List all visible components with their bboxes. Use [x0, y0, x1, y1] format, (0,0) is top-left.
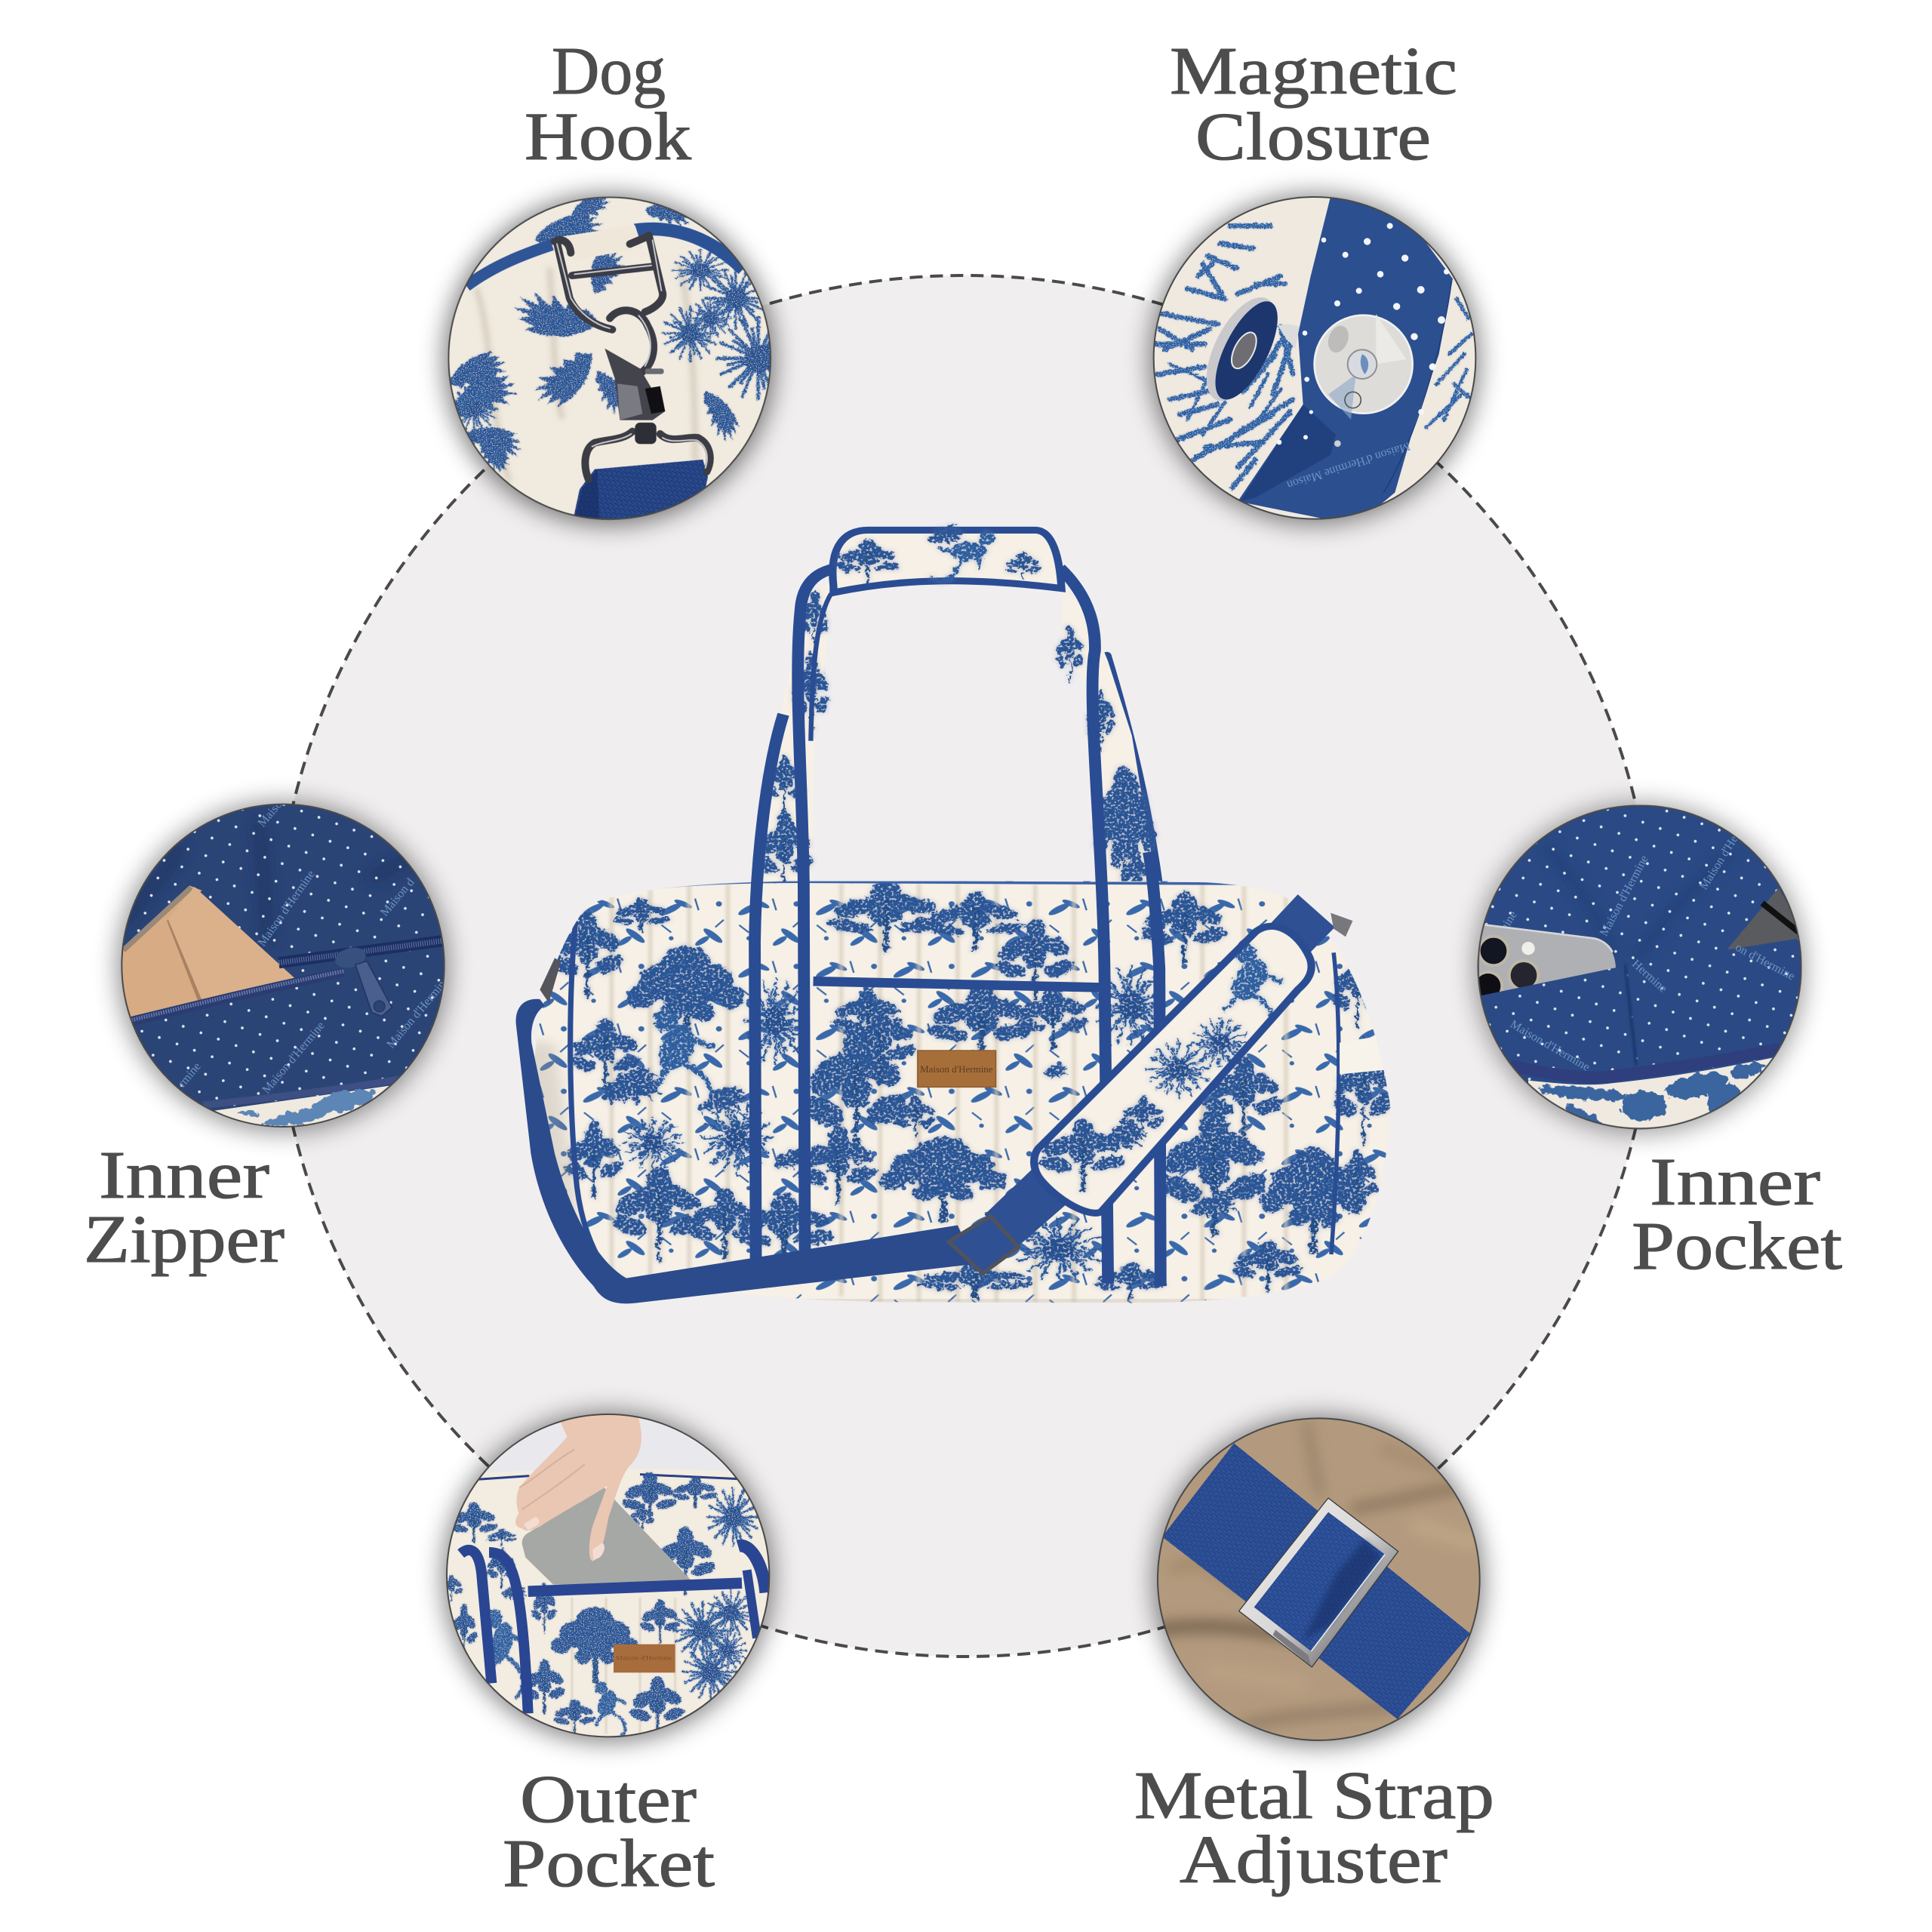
- handle stripes: [755, 568, 1161, 1286]
- handle print: [754, 591, 1155, 908]
- leather patch: [614, 1644, 675, 1672]
- heading: Inner Zipper: Inner: [99, 1138, 269, 1213]
- right magnet disc: [1315, 314, 1413, 420]
- white dots: [1277, 223, 1449, 445]
- printed brand text: Maison d'He: [1697, 833, 1741, 892]
- printed brand text: Maison d: [378, 876, 417, 919]
- metal dog hook: [555, 235, 710, 479]
- panel: magnetic closure photo: [1149, 193, 1487, 525]
- hand: [515, 1414, 641, 1561]
- heading: Inner Pocket: Pocket: [1632, 1209, 1842, 1284]
- printed brand text: [1496, 833, 1741, 939]
- lower lining flap: [131, 955, 450, 1106]
- bag body: [522, 873, 1405, 1312]
- leather patch: Maison d'Hermine: [616, 1654, 672, 1662]
- sketched toile strokes: [1155, 226, 1472, 488]
- strap loop fabric: [555, 225, 642, 260]
- shoulder strap: [516, 894, 1352, 1303]
- quilting channels: [611, 884, 1286, 1302]
- printed brand text: Maison d'Hermine: [1598, 854, 1651, 939]
- heading: Dog Hook: Hook: [525, 100, 691, 174]
- quilting channels: [572, 1598, 675, 1734]
- blue webbing strap: [1162, 1443, 1470, 1719]
- side pocket: [1340, 1035, 1393, 1075]
- zipper line: [476, 1475, 738, 1479]
- pocket front: Maison d'Hermine: [1508, 1018, 1592, 1074]
- toile edge: [214, 1085, 391, 1136]
- background disc with dashed ring: [274, 275, 1655, 1657]
- printed brand text: Maison: [256, 794, 289, 829]
- background bedding: [444, 1417, 776, 1475]
- back handle straps: [1107, 656, 1159, 894]
- polka dots: [1475, 804, 1815, 1136]
- lower zipper: [203, 1079, 399, 1105]
- leather logo patch: [918, 1051, 996, 1087]
- zipper: [1511, 1049, 1780, 1078]
- polka dots: [118, 804, 450, 1136]
- printed brand text lower: [176, 974, 452, 1097]
- grey tablet: [522, 1487, 693, 1585]
- heading: Inner Zipper: Zipper: [84, 1202, 285, 1277]
- tan card case: [118, 885, 295, 1020]
- central product: quilted duffel bag: [516, 525, 1405, 1312]
- metal slider buckle: [1239, 1498, 1398, 1667]
- panel: outer pocket photo: [438, 1412, 776, 1749]
- printed brand text lower: rmine: [176, 1060, 204, 1090]
- wood grain: [1155, 1421, 1479, 1725]
- phone: [1474, 924, 1616, 1000]
- notebook: [1727, 888, 1802, 949]
- pocket front: [1478, 937, 1807, 1136]
- lining folds: [125, 819, 442, 945]
- panel: inner zipper photo: [118, 794, 452, 1136]
- pocket front: Hermine: [1629, 958, 1669, 995]
- heading: Outer Pocket: Pocket: [503, 1826, 715, 1901]
- front pocket piping: [814, 981, 1102, 988]
- heading: Outer Pocket: Outer: [520, 1762, 697, 1837]
- printed brand text: [256, 794, 417, 949]
- heading: Metal Strap Adjuster: Metal Strap: [1134, 1758, 1494, 1833]
- strap slider: [949, 1217, 1019, 1273]
- heading: Metal Strap Adjuster: Adjuster: [1180, 1823, 1447, 1897]
- printed brand text: Maison d'Hermine Maison: [1285, 439, 1412, 491]
- handle fabric: [764, 582, 1158, 952]
- printed brand text lower: Maison d'Hermine: [260, 1020, 328, 1097]
- toile edge: [1528, 1058, 1792, 1136]
- zipper teeth upper: [278, 941, 442, 963]
- pocket front: on d'Hermine: [1733, 941, 1797, 983]
- heading: Inner Pocket: Inner: [1650, 1145, 1820, 1220]
- printed brand text: Maison d'Hermine: [256, 868, 318, 949]
- bag body: [444, 1469, 776, 1749]
- webbing strap: [572, 460, 708, 525]
- blue piping: [466, 245, 552, 286]
- heading: Magnetic Closure: Closure: [1195, 100, 1431, 174]
- zipper pull: [333, 944, 392, 1017]
- fabric creases: [473, 262, 700, 483]
- panel: inner pocket photo: [1474, 804, 1815, 1136]
- heading: Dog Hook: Dog: [552, 34, 666, 109]
- handle top pad: [832, 525, 1062, 592]
- left magnet disc: [1192, 287, 1300, 411]
- heading: Magnetic Closure: Magnetic: [1170, 34, 1457, 109]
- body shading at the ends: [534, 1040, 581, 1223]
- swivel clasp: [605, 349, 665, 444]
- printed brand text lower: Maison d'Hermine: [384, 974, 452, 1051]
- panel: dog hook photo: [444, 187, 801, 525]
- shoulder pad: [1034, 926, 1312, 1213]
- printed brand text: mine: [1496, 909, 1520, 936]
- dotted blue flap: [1238, 195, 1453, 525]
- pocket piping: [528, 1583, 742, 1592]
- top zipper piping: [617, 881, 1238, 892]
- handle piping: [461, 1546, 766, 1713]
- panel: metal strap adjuster photo: [1154, 1414, 1487, 1746]
- leather logo patch: Maison d'Hermine: [920, 1064, 993, 1075]
- lining folds: [1546, 844, 1734, 960]
- metal pin: [1334, 440, 1341, 447]
- toile print: [450, 198, 770, 473]
- toile print: [438, 1472, 760, 1739]
- side piping: [571, 921, 599, 1260]
- toile print on body: [549, 881, 1393, 1300]
